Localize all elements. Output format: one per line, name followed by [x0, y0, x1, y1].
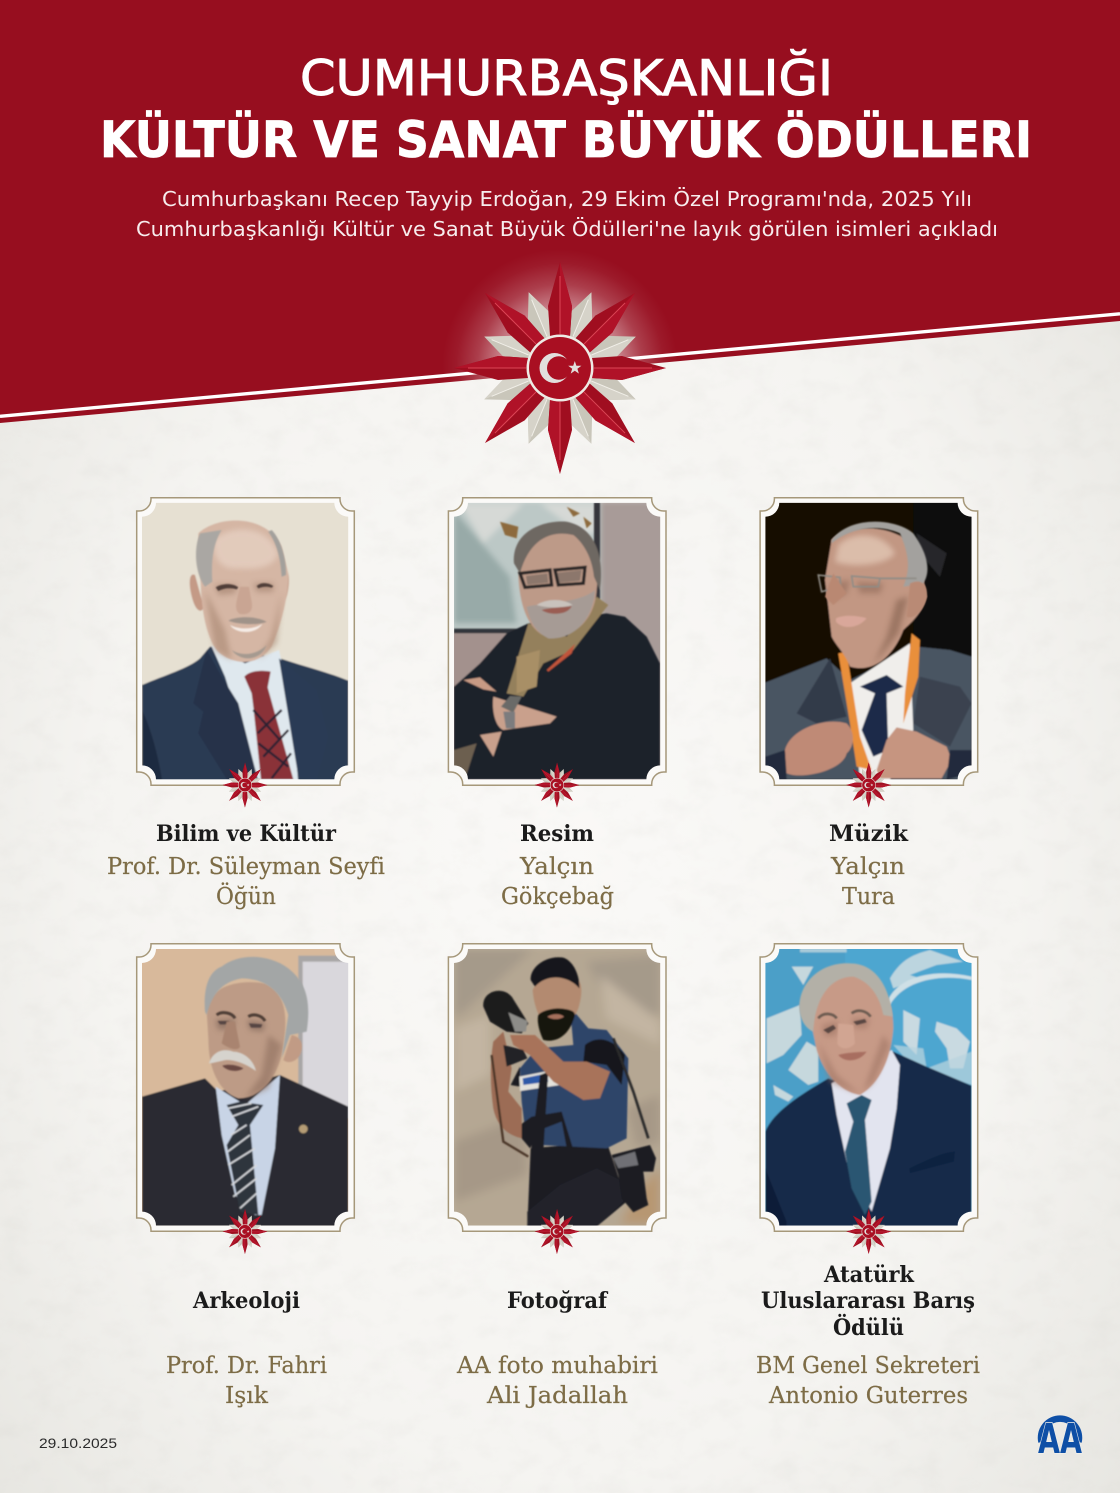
title: CUMHURBAŞKANLIĞI — [300, 48, 833, 107]
text: Atatürk Uluslararası Barış Ödülü: Atatürk — [823, 1262, 914, 1288]
text: Fotoğraf — [456, 1288, 658, 1409]
text: Bilim ve Kültür — [107, 821, 385, 910]
text: Atatürk Uluslararası Barış Ödülü: BM Genel Sekreteri — [756, 1353, 980, 1379]
photo: Fahri Işık — [138, 945, 352, 1228]
text: Atatürk Uluslararası Barış Ödülü: Ödülü — [833, 1313, 904, 1341]
panel: Atatürk Uluslararası Barış Ödülü — [760, 944, 978, 1254]
small star ornament — [535, 1209, 579, 1254]
text: Bilim ve Kültür: Bilim ve Kültür — [156, 821, 337, 847]
text: Resim: Gökçebağ — [501, 884, 614, 910]
small star ornament — [223, 1209, 267, 1254]
text: Atatürk Uluslararası Barış Ödülü: Antonio Guterres — [768, 1383, 968, 1409]
text: Müzik — [829, 821, 908, 910]
icon: AA logo — [1038, 1415, 1082, 1463]
text: Fotoğraf: AA foto muhabiri — [456, 1353, 658, 1379]
text: Arkeoloji: Arkeoloji — [192, 1288, 300, 1314]
text: Müzik: Tura — [842, 884, 895, 910]
text: Arkeoloji: Prof. Dr. Fahri — [166, 1353, 327, 1379]
panel: Fotoğraf — [447, 942, 673, 1254]
panel: Resim — [448, 498, 667, 807]
panel: Bilim ve Kültür — [137, 498, 354, 807]
panel: Arkeoloji — [137, 944, 354, 1254]
photo: Süleyman Seyfi Öğün — [138, 500, 352, 783]
text: Bilim ve Kültür: Prof. Dr. Süleyman Seyfi — [107, 854, 385, 880]
small star ornament — [846, 1209, 891, 1254]
text: Müzik: Yalçın — [830, 854, 905, 880]
title — [100, 48, 1032, 169]
text: Atatürk Uluslararası Barış Ödülü: Uluslararası Barış — [761, 1288, 975, 1314]
text: Resim: Yalçın — [519, 854, 594, 880]
date: 29.10.2025 — [39, 1435, 117, 1451]
text: Atatürk Uluslararası Barış Ödülü — [756, 1262, 980, 1409]
photo: Yalçın Gökçebağ — [450, 500, 667, 783]
small star ornament — [223, 763, 267, 807]
subtitle: Cumhurbaşkanlığı Kültür ve Sanat Büyük Ödülleri'ne layık görülen isimleri açıkladı — [136, 216, 998, 241]
subtitle — [136, 186, 998, 241]
text: Arkeoloji — [166, 1288, 327, 1409]
text: Müzik: Müzik — [829, 821, 908, 847]
text: Arkeoloji: Işık — [225, 1383, 269, 1409]
title: KÜLTÜR VE SANAT BÜYÜK ÖDÜLLERI — [100, 110, 1032, 169]
photo: Ali Jadallah — [454, 949, 660, 1226]
red diagonal header band — [0, 0, 1120, 430]
text: Resim: Resim — [520, 821, 594, 847]
emblem: sixteen-point star with crescent — [454, 262, 666, 474]
text: Fotoğraf: Fotoğraf — [507, 1288, 608, 1314]
icon: AA logo: AA — [1038, 1415, 1082, 1463]
photo: Antonio Guterres — [760, 945, 977, 1232]
subtitle: Cumhurbaşkanı Recep Tayyip Erdoğan, 29 Ekim Özel Programı'nda, 2025 Yılı — [162, 186, 972, 211]
text: Resim — [501, 821, 614, 910]
text: Fotoğraf: Ali Jadallah — [486, 1383, 628, 1409]
photo: Yalçın Tura — [760, 500, 977, 783]
small star ornament — [535, 763, 579, 807]
small star ornament — [846, 763, 891, 807]
panel: Müzik — [760, 498, 978, 807]
text: Bilim ve Kültür: Öğün — [216, 883, 276, 910]
